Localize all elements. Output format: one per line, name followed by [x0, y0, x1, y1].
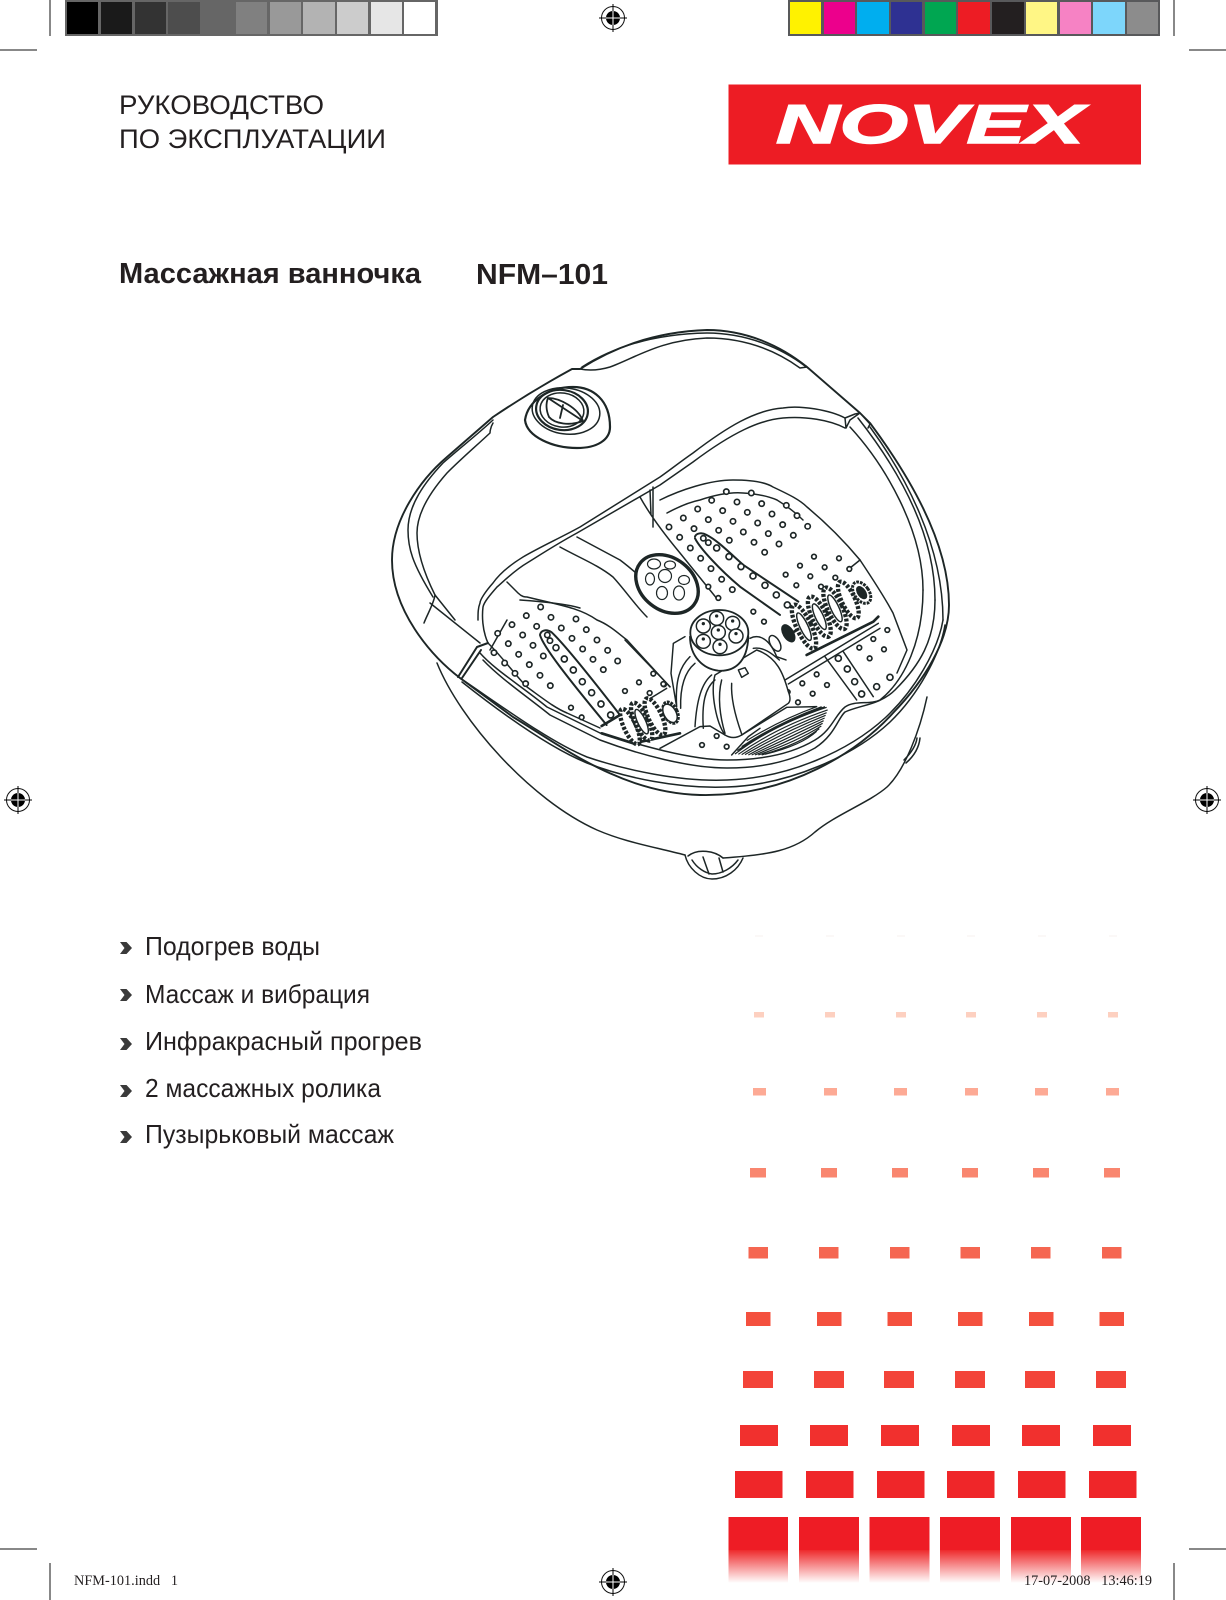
right pad dots — [666, 489, 852, 615]
tub body lower outline — [437, 663, 927, 858]
foot spa line drawing — [392, 330, 949, 879]
head tab — [738, 668, 748, 677]
outer rim — [392, 330, 949, 795]
right foot pad outline — [660, 480, 907, 673]
left pad dots — [491, 604, 670, 725]
print slug: file name: NFM-101.indd 1 — [74, 1573, 178, 1589]
central massager with arms and dome — [660, 610, 828, 755]
model number: NFM–101 — [476, 259, 608, 291]
brand logo — [728, 84, 1141, 164]
basin opening — [478, 407, 935, 768]
manual title — [119, 90, 386, 154]
heating grille — [735, 707, 828, 755]
feature: two rollers: 2 массажных ролика — [145, 1073, 382, 1103]
feature list — [120, 931, 422, 1149]
head disc with nodes — [690, 610, 748, 655]
tub foot — [685, 851, 743, 879]
lower basin floor details and dots — [660, 609, 893, 755]
right massage roller — [779, 579, 878, 655]
product name: Массажная ванночка — [119, 258, 422, 290]
decorative red gradient grid — [728, 935, 1141, 1583]
feature: bubble massage: Пузырьковый массаж — [145, 1119, 395, 1149]
brand logo: NOVEX — [776, 93, 1089, 155]
registration mark: top — [599, 4, 627, 32]
left massage roller — [602, 696, 681, 747]
registration mark: left — [4, 786, 32, 814]
dome ribs and arms — [671, 637, 786, 734]
oval bubble plate — [624, 543, 710, 625]
feature: massage and vibration: Массаж и вибрация — [145, 979, 370, 1009]
grayscale calibration bar — [65, 0, 438, 36]
colour calibration bar — [788, 0, 1160, 36]
manual title: ПО ЭКСПЛУАТАЦИИ — [119, 124, 386, 154]
massager head — [690, 637, 748, 671]
feature: infrared heating: Инфракрасный прогрев — [145, 1026, 422, 1056]
print slug: date and time: 17-07-2008 13:46:19 — [1024, 1573, 1152, 1589]
temperature dial — [525, 383, 610, 448]
manual title: РУКОВОДСТВО — [119, 90, 324, 120]
registration mark: right — [1193, 786, 1221, 814]
left foot pad outline — [488, 487, 718, 728]
supporting dome — [713, 650, 790, 737]
feature: water heating: Подогрев воды — [145, 931, 320, 961]
small side roller — [660, 633, 783, 725]
registration mark: bottom — [599, 1568, 627, 1596]
